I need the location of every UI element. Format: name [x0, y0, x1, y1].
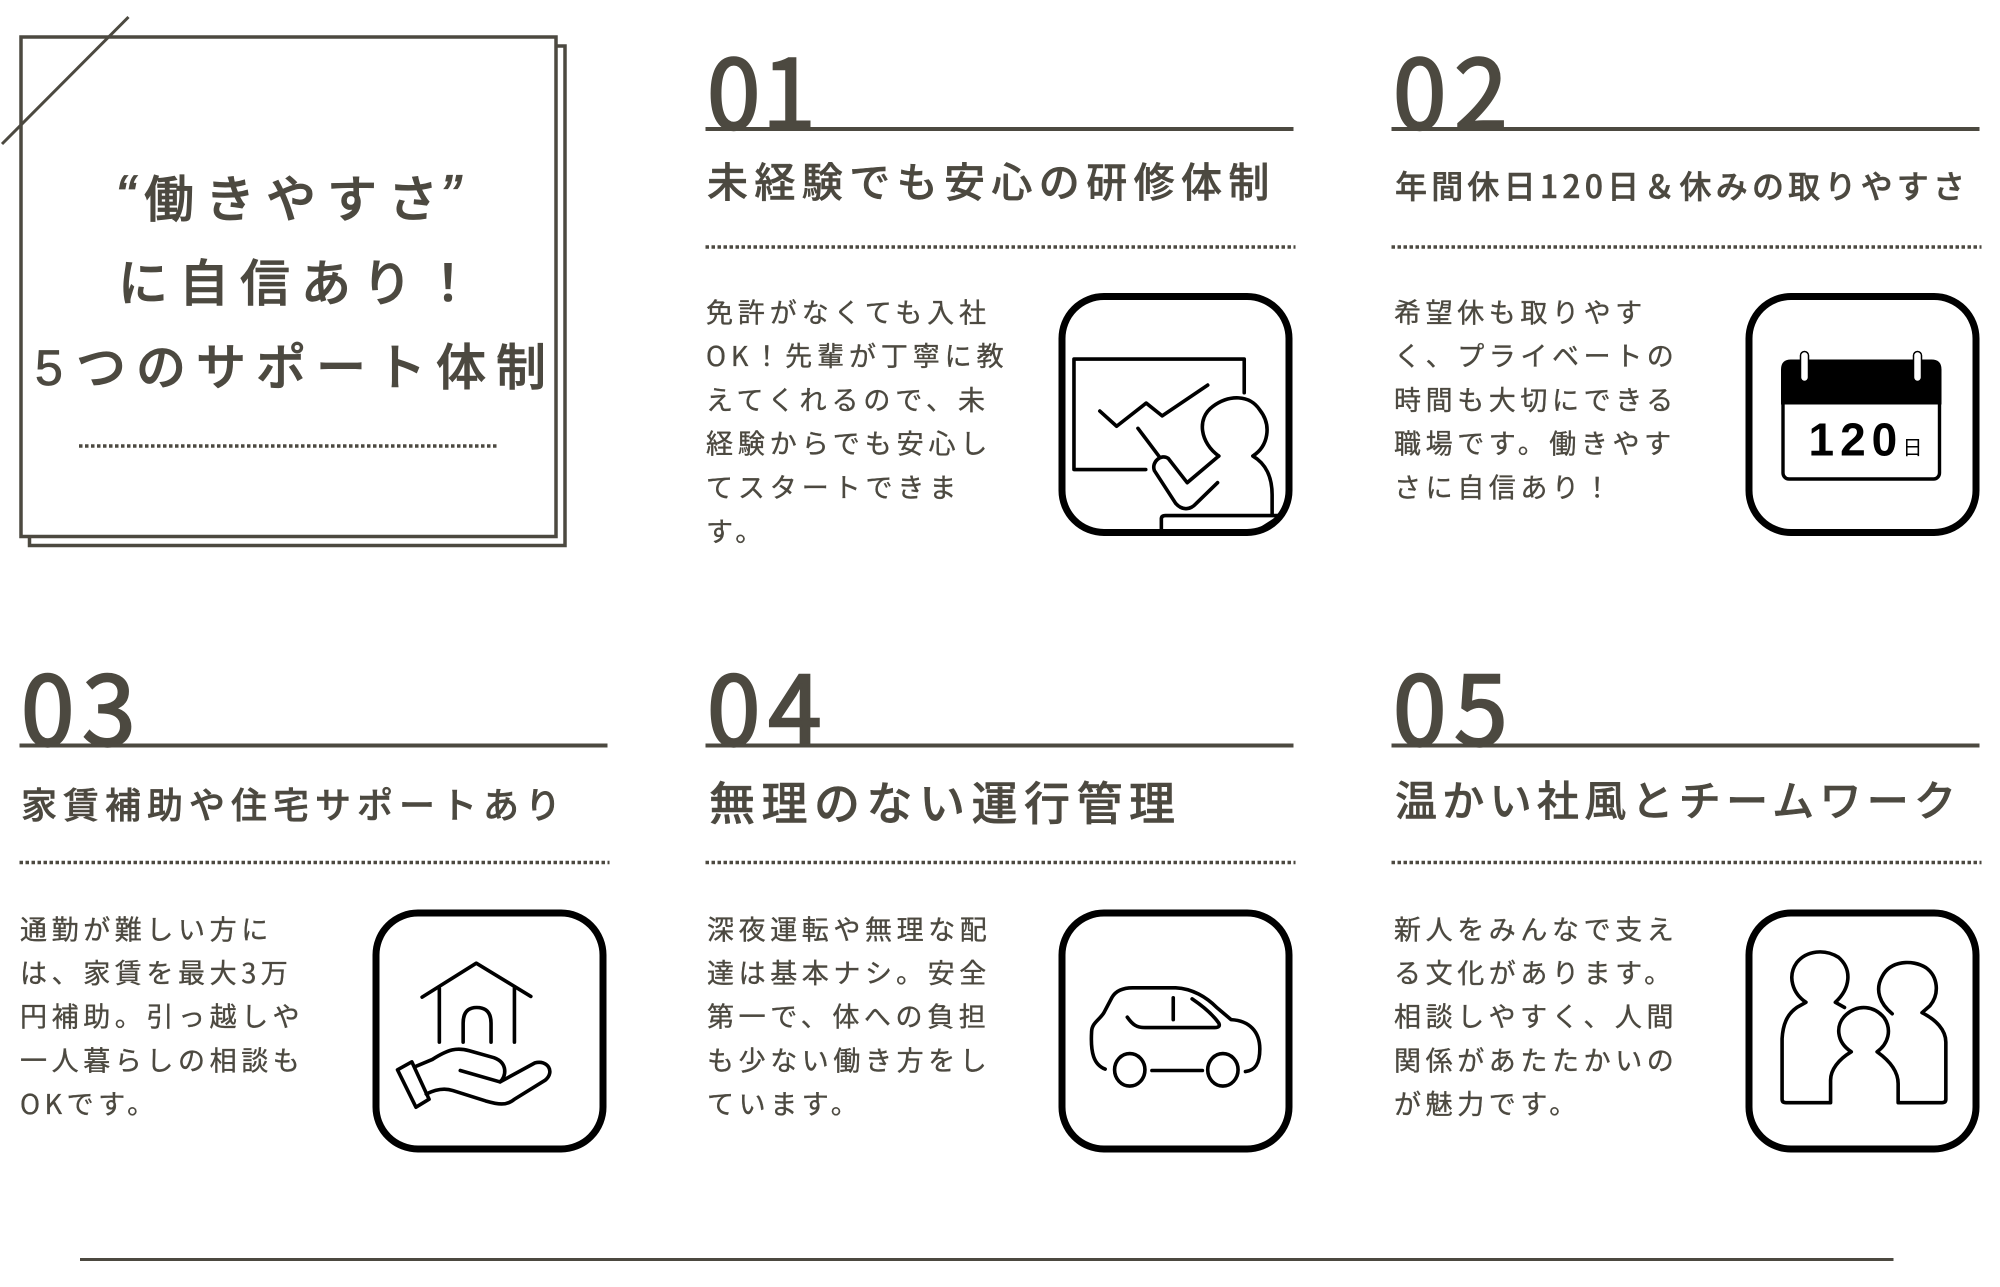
number 03: 03	[21, 634, 144, 774]
heading 02: 年間休日120日＆休みの取りやすさ	[1395, 162, 1965, 208]
icon: calendar 120 days: 120	[1808, 414, 1903, 466]
title line 3: つのサポート体制	[76, 328, 556, 400]
panel: 05 teamwork	[1392, 634, 1982, 1149]
panel: 02 holidays	[1392, 18, 1982, 532]
body 02: 希望休も取りやす	[1394, 292, 1647, 330]
body 04: ています。	[707, 1083, 862, 1122]
body 03: OKです。	[20, 1083, 159, 1122]
body 05: る文化があります。	[1394, 952, 1676, 991]
body 05: 相談しやすく、人間	[1394, 996, 1678, 1034]
body 02: く、プライベートの	[1394, 335, 1678, 374]
body 03: は、家賃を最大3万	[20, 952, 292, 991]
body 04: 達は基本ナシ。安全	[707, 952, 991, 991]
heading 04: 無理のない運行管理	[709, 768, 1182, 834]
heading 01: 未経験でも安心の研修体制	[707, 149, 1276, 209]
panel: title card	[2, 17, 565, 546]
body 01: OK！先輩が丁寧に教	[706, 335, 1008, 374]
body 01: す。	[706, 510, 767, 550]
body 04: も少ない働き方をし	[707, 1040, 991, 1078]
panel: 03 housing	[20, 634, 610, 1149]
heading 03: 家賃補助や住宅サポートあり	[21, 777, 567, 829]
icon: calendar 120 days: 日	[1902, 432, 1922, 460]
panel: 04 operations	[706, 634, 1296, 1149]
icon: calendar 120 days	[1749, 296, 1976, 532]
body 05: 関係があたたかいの	[1394, 1040, 1678, 1078]
body 04: 第一で、体への負担	[707, 996, 990, 1034]
icon: presenter at chart	[1062, 296, 1289, 532]
icon: car	[1062, 913, 1289, 1149]
panel: 01 training	[706, 18, 1296, 550]
body 02: 職場です。働きやす	[1394, 422, 1676, 462]
body 03: 円補助。引っ越しや	[20, 996, 304, 1034]
body 03: 一人暮らしの相談も	[20, 1040, 304, 1078]
title line 1: “	[115, 163, 138, 230]
body 01: てスタートできま	[706, 466, 961, 506]
body 02: 時間も大切にできる	[1394, 379, 1678, 418]
body 01: えてくれるので、未	[706, 379, 990, 418]
title line 3: 5	[35, 340, 74, 396]
body 01: 免許がなくても入社	[706, 292, 991, 330]
title line 1: 働きやすさ	[144, 160, 449, 232]
body 05: が魅力です。	[1394, 1083, 1581, 1122]
body 04: 深夜運転や無理な配	[707, 908, 991, 948]
number 01: 01	[707, 18, 818, 157]
number 02: 02	[1393, 18, 1516, 157]
body 01: 経験からでも安心し	[706, 422, 992, 462]
footer rule	[80, 1258, 1894, 1261]
icon: family group	[1749, 913, 1976, 1149]
body 03: 通勤が難しい方に	[20, 908, 273, 948]
icon: house on hand	[376, 913, 603, 1149]
body 02: さに自信あり！	[1394, 466, 1615, 506]
title line 1: ”	[440, 163, 463, 230]
body 05: 新人をみんなで支え	[1394, 908, 1678, 948]
heading 05: 温かい社風とチームワーク	[1395, 768, 1961, 829]
number 05: 05	[1393, 634, 1516, 774]
number 04: 04	[707, 634, 830, 774]
title line 2: に自信あり！	[118, 244, 484, 316]
